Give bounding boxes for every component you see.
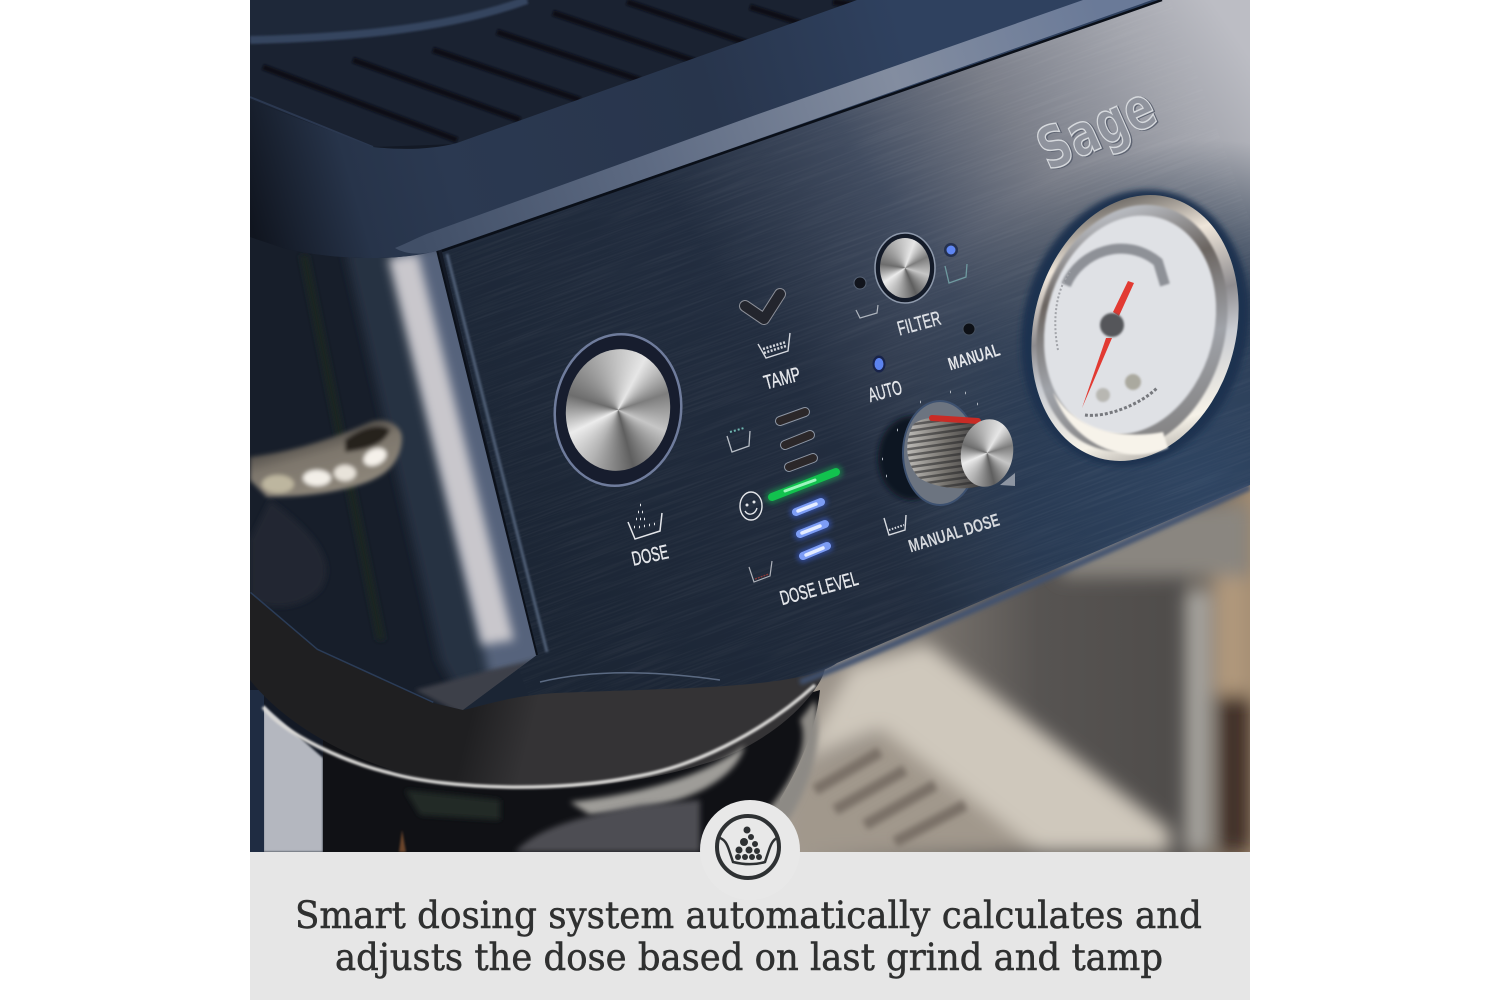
icon: tamp basket	[758, 333, 790, 358]
icon: cup high	[727, 428, 750, 452]
icon: smiley	[740, 492, 762, 520]
label: DOSE LEVEL: DOSE LEVEL	[778, 568, 861, 610]
icon: dose grounds in basket	[628, 505, 662, 539]
gauge needle	[1082, 281, 1134, 408]
icon: filter right indicator	[944, 243, 967, 283]
check mark inner	[745, 294, 780, 319]
Sage logo embossed: Sage	[1028, 73, 1167, 185]
icon: dosing basket with grounds	[717, 816, 779, 878]
chrome rim	[263, 685, 815, 787]
label: AUTO: AUTO	[866, 377, 905, 407]
caption text: adjusts the dose based on last grind and tamp	[335, 936, 1163, 979]
control panel face	[436, 0, 1250, 710]
Sage logo embossed: Sage	[1027, 72, 1166, 184]
dose level: green bar	[772, 472, 836, 497]
label: MANUAL DOSE: MANUAL DOSE	[906, 510, 1002, 556]
photo base	[250, 74, 944, 852]
charcoal felt	[250, 590, 825, 787]
LED: auto	[872, 356, 886, 372]
seam strip	[447, 254, 547, 652]
caption text	[295, 894, 1202, 979]
gauge scale	[1066, 249, 1165, 285]
icon tab	[700, 800, 800, 900]
manual dose dial cap	[955, 415, 1019, 491]
dark underside	[323, 690, 820, 852]
label: DOSE: DOSE	[630, 541, 671, 571]
filter button ring	[875, 233, 935, 303]
LED: manual	[963, 323, 975, 335]
dose button knob	[558, 342, 678, 478]
portafilter	[250, 590, 825, 852]
handle loop	[250, 420, 402, 497]
front lip of drip tray	[250, 0, 1162, 258]
machine pillar	[250, 251, 537, 710]
product photo: espresso machine control panel	[250, 0, 1250, 1000]
dose level: dark bars	[780, 412, 813, 467]
drip tray top surface	[250, 0, 860, 147]
label: FILTER: FILTER	[895, 308, 943, 340]
caption text: Smart dosing system automatically calculates and	[295, 894, 1202, 937]
icon: manual dose cup	[884, 515, 906, 535]
cup disc	[250, 0, 530, 42]
label: TAMP: TAMP	[762, 364, 803, 394]
label: MANUAL: MANUAL	[946, 340, 1002, 374]
dose button ring	[554, 333, 682, 487]
dose level: blue bars	[796, 502, 827, 556]
icon: filter left indicator	[854, 277, 878, 318]
blurred kitchen background	[780, 480, 1250, 852]
icon: cup low	[749, 561, 772, 582]
manual dose dial	[878, 392, 1015, 505]
Sage logo embossed	[1037, 96, 1158, 170]
silver strip left	[263, 705, 323, 852]
pressure gauge	[1018, 186, 1250, 467]
icon: tamp check mark	[745, 294, 780, 319]
caption bar	[250, 852, 1250, 1000]
filter button knob	[880, 238, 930, 298]
tray slats	[263, 2, 857, 140]
gauge hub	[1100, 313, 1124, 337]
